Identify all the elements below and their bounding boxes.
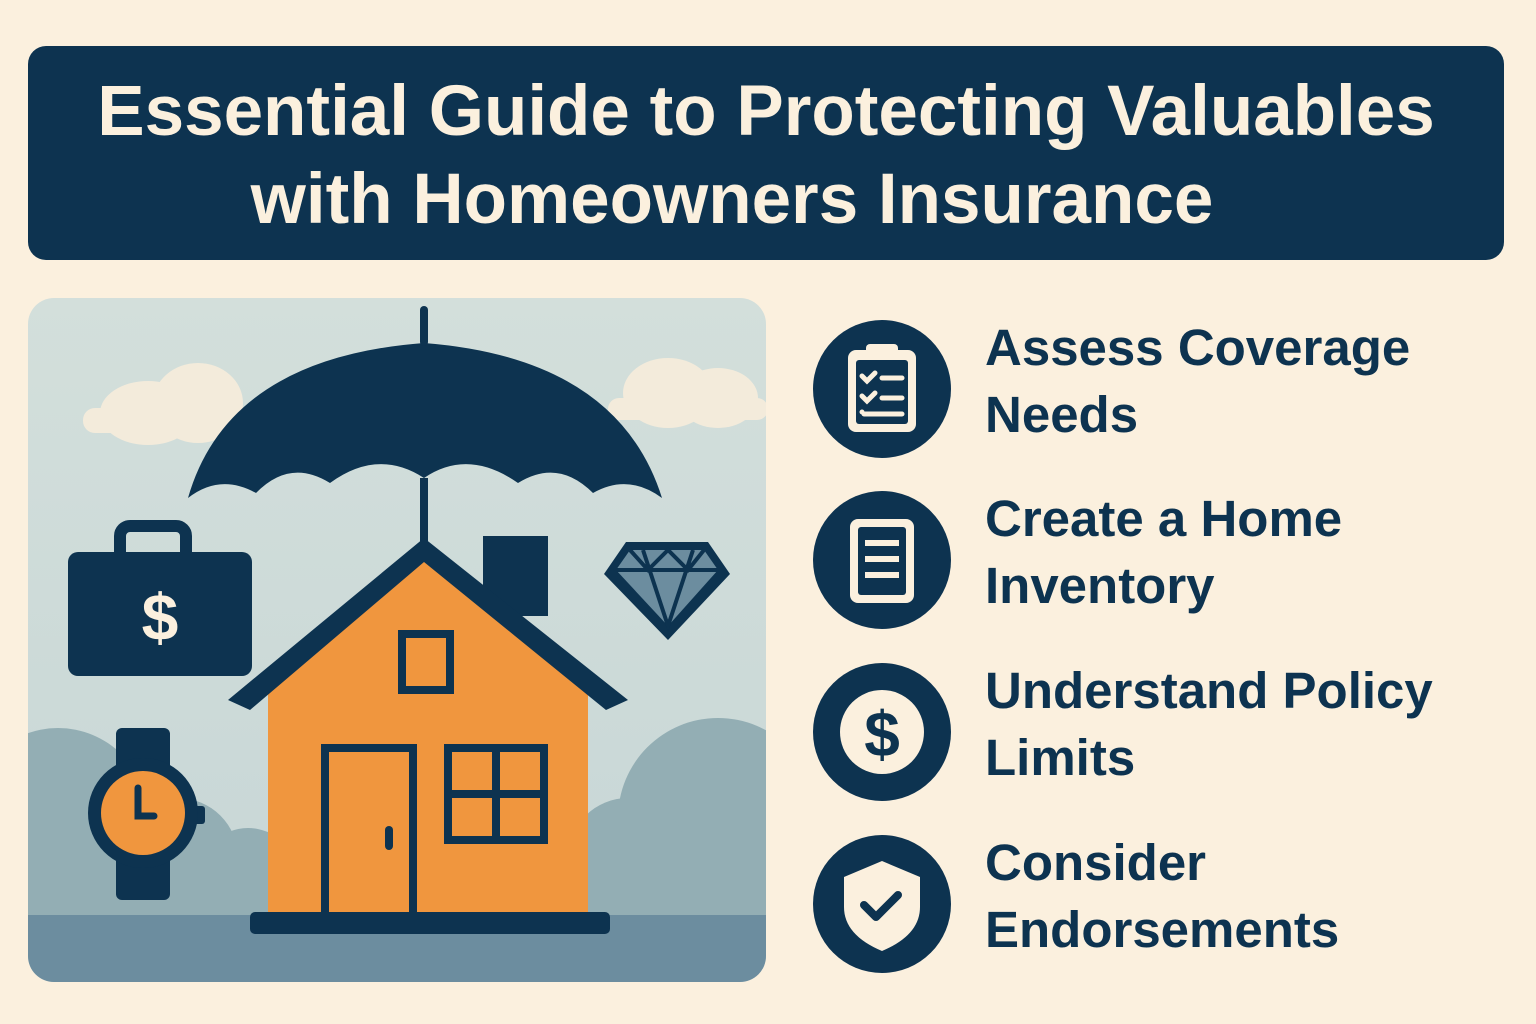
title xyxy=(28,46,1504,260)
item: assess coverage needs: Needs xyxy=(985,386,1138,443)
icon: money bag: $ xyxy=(142,580,178,654)
title: with Homeowners Insurance xyxy=(251,160,1213,239)
hills xyxy=(28,718,766,915)
icon: diamond xyxy=(604,542,730,640)
item: policy limits xyxy=(813,662,1433,801)
icon: clipboard xyxy=(813,320,951,458)
clouds xyxy=(83,358,768,445)
item: endorsements xyxy=(813,834,1339,973)
icon: money bag xyxy=(68,526,252,676)
item: home inventory xyxy=(813,490,1342,629)
house xyxy=(228,536,628,934)
item: policy limits: Understand Policy xyxy=(985,662,1433,719)
item: endorsements: Consider xyxy=(985,834,1206,891)
icon: dollar coin xyxy=(813,663,951,801)
umbrella xyxy=(188,306,662,548)
item: home inventory: Create a Home xyxy=(985,490,1342,547)
item: assess coverage needs xyxy=(813,319,1410,458)
illustration panel xyxy=(28,298,766,982)
icon: watch xyxy=(88,728,205,900)
item: policy limits: Limits xyxy=(985,729,1135,786)
icon: document xyxy=(813,491,951,629)
icon: dollar coin: $ xyxy=(864,698,900,770)
icon: shield xyxy=(813,835,951,973)
item: home inventory: Inventory xyxy=(985,557,1215,614)
item: assess coverage needs: Assess Coverage xyxy=(985,319,1410,376)
title: Essential Guide to Protecting Valuables xyxy=(97,72,1435,151)
item: endorsements: Endorsements xyxy=(985,901,1339,958)
